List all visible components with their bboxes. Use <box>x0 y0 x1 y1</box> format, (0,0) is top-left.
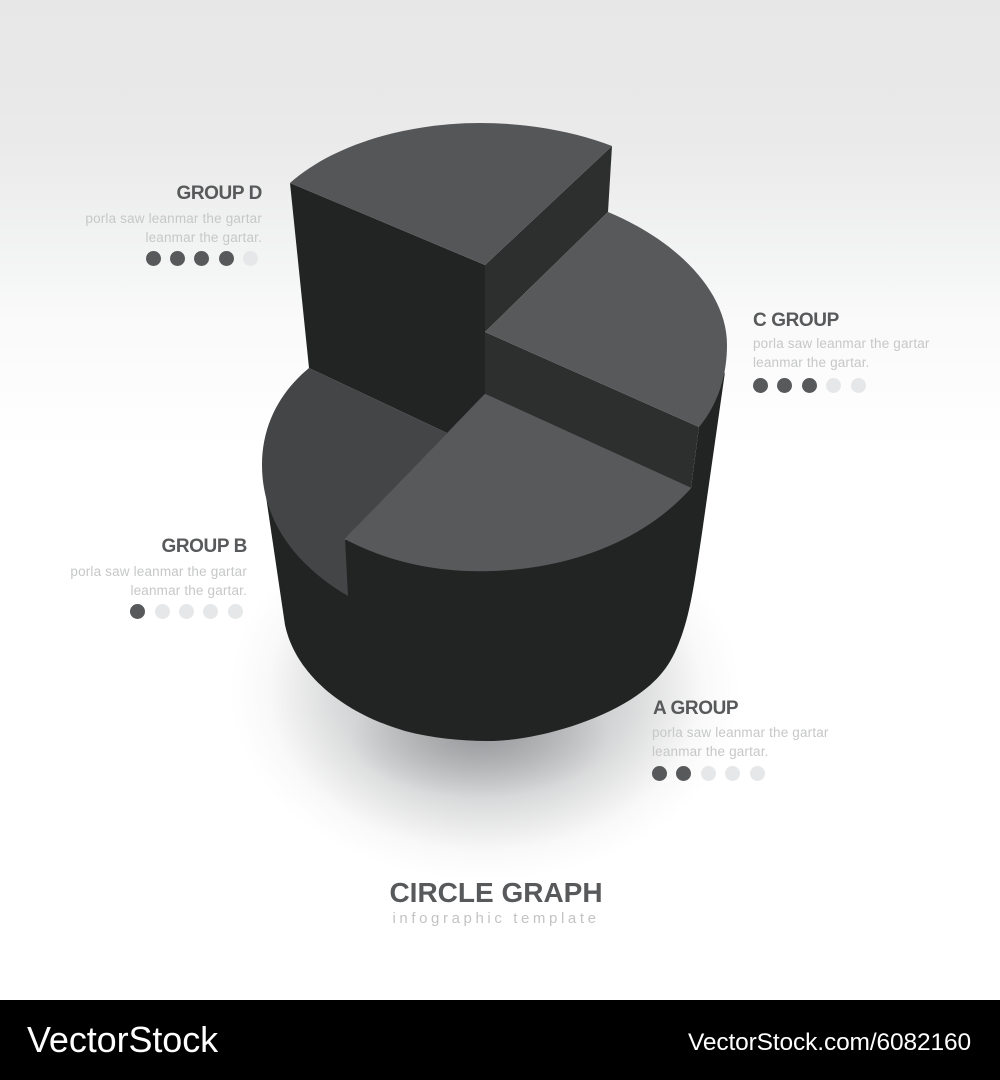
segment: group D side wall <box>290 183 485 433</box>
label: group B <box>70 536 247 619</box>
label: group C: leanmar the gartar. <box>753 355 870 370</box>
label: group B: leanmar the gartar. <box>130 583 247 598</box>
label: group A: leanmar the gartar. <box>652 744 769 759</box>
segment: group B top <box>262 368 447 596</box>
segment: group C inner wall <box>485 332 699 488</box>
label: group D: leanmar the gartar. <box>145 230 262 245</box>
cylinder body <box>264 372 725 741</box>
title <box>389 877 603 927</box>
watermark footer: VectorStock.com/6082160 <box>688 1029 971 1056</box>
label: group C: C GROUP <box>753 310 839 331</box>
title: CIRCLE GRAPH <box>389 877 603 908</box>
label: group A: A GROUP <box>653 698 738 719</box>
segment: group D top <box>290 123 612 265</box>
label: group B: porla saw leanmar the gartar <box>70 564 247 579</box>
watermark footer: VectorStock <box>27 1019 218 1060</box>
label: group A <box>652 698 829 781</box>
watermark footer <box>0 1000 1000 1080</box>
label: group C <box>753 310 930 393</box>
label: group A: porla saw leanmar the gartar <box>652 725 829 740</box>
segment: group C top <box>485 212 727 427</box>
label: group D: GROUP D <box>176 183 262 204</box>
segment: group A top <box>345 394 691 571</box>
segment: group D inner wall <box>485 146 612 332</box>
label: group B: GROUP B <box>161 536 247 557</box>
label: group D <box>85 183 262 266</box>
cast shadow <box>230 500 740 880</box>
label: group D: porla saw leanmar the gartar <box>85 211 262 226</box>
background gradient <box>0 0 1000 450</box>
label: group C: porla saw leanmar the gartar <box>753 336 930 351</box>
title: infographic template <box>392 910 600 927</box>
